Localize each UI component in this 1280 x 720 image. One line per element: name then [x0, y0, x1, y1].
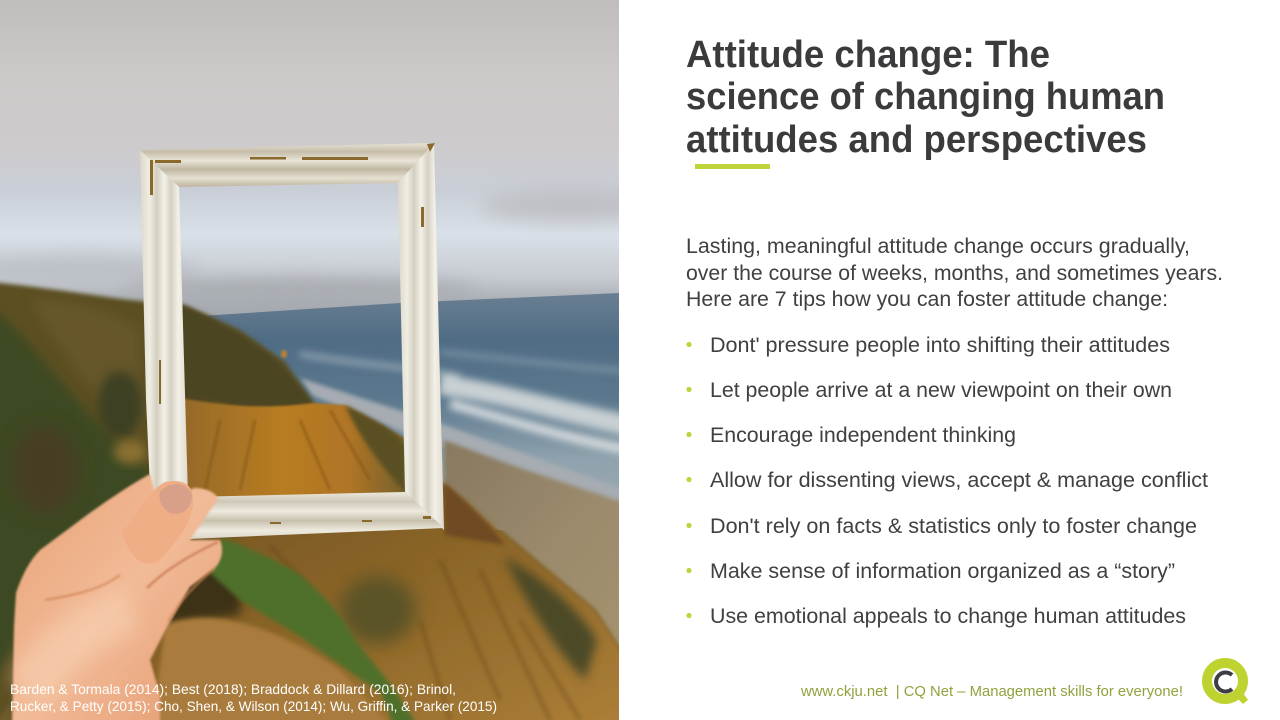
source citations: Barden & Tormala (2014); Best (2018); Braddock & Dillard (2016); Brinol, — [10, 681, 456, 697]
intro text: Here are 7 tips how you can foster attitude change: — [686, 287, 1168, 311]
frame top rail — [140, 143, 434, 187]
green shrub strip — [210, 538, 420, 720]
beach sand — [442, 438, 619, 648]
brown hill patch — [41, 304, 136, 384]
title: Attitude change: The — [686, 34, 1050, 76]
upper hill left — [0, 280, 410, 720]
dark scrub patch — [98, 371, 142, 439]
tip 4: Allow for dissenting views, accept & manage conflict — [710, 468, 1208, 492]
tip 6: Make sense of information organized as a “story” — [710, 559, 1175, 583]
footer text: www.ckju.net | CQ Net – Management skills for everyone! — [800, 684, 1183, 700]
tip 2: Let people arrive at a new viewpoint on their own — [710, 378, 1172, 402]
hill shrub in frame — [180, 305, 313, 410]
thumbnail — [159, 484, 192, 514]
orange tip of headland — [281, 350, 287, 358]
title: attitudes and perspectives — [686, 119, 1147, 161]
scrub on right of frame — [345, 405, 405, 492]
thumb — [122, 481, 193, 564]
wet sand — [300, 377, 619, 500]
sea — [206, 293, 619, 530]
orange cliff in frame — [180, 398, 405, 505]
frame left rail — [140, 150, 188, 510]
intro text: Lasting, meaningful attitude change occurs gradually, — [686, 234, 1190, 258]
red scrub right of frame — [444, 483, 505, 545]
tip 7: Use emotional appeals to change human attitudes — [710, 604, 1186, 628]
green slope at left — [0, 312, 150, 676]
dark area under frame — [169, 572, 246, 624]
bullet list: 7 tips — [686, 333, 1208, 628]
title: science of changing human — [686, 76, 1165, 118]
surf — [300, 352, 640, 452]
frame bottom rail — [189, 492, 444, 539]
intro text — [686, 234, 1223, 311]
picture frame — [140, 143, 444, 540]
intro text: over the course of weeks, months, and sometimes years. — [686, 261, 1223, 285]
tip 5: Don't rely on facts & statistics only to foster change — [710, 514, 1197, 538]
dark scrub on far cliff edge — [504, 557, 597, 680]
tan slope — [150, 618, 385, 720]
source citations — [10, 681, 497, 714]
source citations: Rucker, & Petty (2015); Cho, Shen, & Wilson (2014); Wu, Griffin, & Parker (2015) — [10, 698, 497, 714]
dark blob — [340, 576, 416, 644]
reddish scrub — [15, 432, 75, 508]
highlight on palm — [30, 610, 130, 690]
hand holding the frame — [12, 474, 222, 720]
tip 1: Dont' pressure people into shifting their attitudes — [710, 333, 1170, 357]
finger creases — [147, 542, 218, 588]
lower cliff — [150, 480, 619, 720]
title underline — [695, 164, 770, 169]
background photo: hand holding a picture frame over a coastal cliff — [0, 0, 680, 720]
photo base ground — [0, 530, 619, 720]
sky — [0, 0, 619, 325]
icon: CQ logo — [1207, 663, 1248, 704]
tip 3: Encourage independent thinking — [710, 423, 1016, 447]
cliff streaks — [270, 545, 580, 720]
title — [686, 34, 1165, 161]
frame right rail — [398, 143, 444, 530]
yellow grass patch — [114, 440, 146, 464]
clouds — [0, 188, 619, 296]
chipped paint marks — [150, 143, 435, 526]
